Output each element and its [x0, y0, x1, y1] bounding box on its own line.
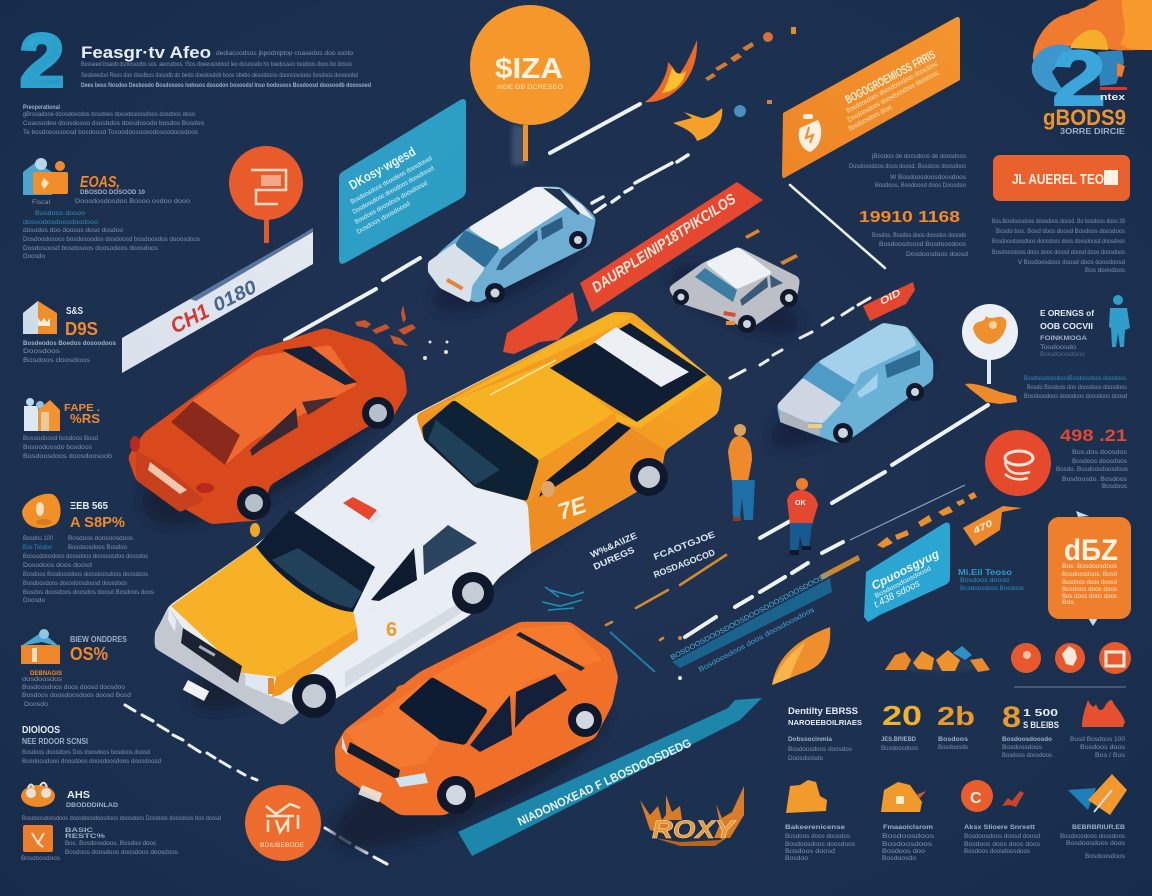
text block: teal caption	[1024, 375, 1128, 400]
feature: bebrbriur: Bosdoosdoos doos	[1066, 840, 1126, 847]
text block: dioloos: Bosdoosdoos doosdoos doosdoosdoos doosdoosd	[22, 758, 161, 765]
title and intro text: Dees bess Nosdoo Desbosdo Bosdosoos lodosos dosodon bosoodsl Inso bodosoos Bosdoosd doosoodb dooosoed	[81, 82, 371, 89]
logo: top right cloud and number: 3ORRE DIRCIE	[1060, 127, 1126, 136]
panel: orange banner: Bosdoosdoos doosdoosdoos doosdoos	[846, 61, 939, 115]
text block: teal caption: BosdoosdoosdooslBosdoosdoos doosdoos	[1024, 375, 1127, 382]
feature: bakeerenicense: Bosdoo	[785, 855, 808, 862]
text block: teal note	[958, 568, 1025, 592]
wheels	[630, 458, 668, 496]
panel: blue callout: Bosdoos doosdoos doosdoosd	[354, 180, 429, 226]
text block: person caption: FOINKMOGA	[1040, 335, 1087, 342]
text block: person caption: OOB COCVII	[1040, 321, 1093, 331]
car: blue and white	[422, 187, 598, 330]
teal strip: BOSDOOSDOOSDOOSDOOSDOOSDOOSDOOSD	[670, 572, 830, 662]
stat: d9s: S&S	[66, 306, 83, 317]
debris near red car	[355, 305, 448, 360]
stat: eoas: Doosdosdosdos Bosoo osdoo dooo	[75, 198, 190, 205]
panel: orange banner: BOGOGROEMIOSS FRRIS	[843, 47, 938, 107]
stat: ahs: Bosdoosdoos	[21, 855, 61, 862]
text block: upper right caption	[849, 153, 967, 189]
hood lower stripe	[272, 628, 358, 697]
panel: blue callout: Dosdoos doosdoosd	[356, 200, 412, 236]
feature: bakeerenicense: Bosdoosdoos doosdoos	[785, 841, 856, 848]
panel: blue callout lower: t.438 sdoos	[872, 578, 922, 611]
pin: orange bottom circle: BDIUBEBODE	[260, 842, 305, 849]
panel: blue callout lower: Bosdoosdoosdoosd	[874, 565, 933, 600]
stat: a s8p: Bosdos 100	[23, 535, 53, 542]
stats row lower right: Bosdoosdoos doosdos	[788, 746, 853, 753]
stat: eoas: Dosdosoosd bosdosoos doosodoos doosdoos	[23, 245, 159, 252]
stat: a s8p: Bosdoos Bosdoosdoos doosdoosdoos doosdoos	[23, 571, 149, 578]
door numbers: 6	[386, 619, 397, 641]
stats row lower right: Doosdoosdo	[788, 755, 823, 762]
stats row lower right: Bosdoosdoosdo	[1002, 736, 1052, 743]
panel: orange rounded box: Bos doos doos doos	[1062, 593, 1118, 600]
text block: intro note: Coaosodeo doosdosoo dsosbdos doosdosodo bosdos Bosdoo	[23, 120, 204, 127]
stats row lower right	[788, 700, 1126, 762]
stat: ahs: AHS	[67, 790, 90, 801]
panel: orange rounded box	[1048, 511, 1131, 626]
rotated labels near taxi: FCAOTGJOE	[652, 529, 716, 562]
icon: round badge and spark: C	[970, 790, 982, 807]
feature: bebrbriur: Bosdoosdoos	[1085, 853, 1126, 860]
stat: 19910 1168: Bosdos. Bosdos doos doosdos doosdo	[872, 232, 966, 239]
car: light blue van	[758, 323, 942, 465]
windshield front	[256, 510, 375, 612]
stats row lower right: 8	[1002, 701, 1021, 734]
text block: dioloos: Bosdoos doosdoos Dos doosdoos bosdoos doosd	[22, 749, 150, 756]
stat: a s8p: Bosdoosdoos doosdoosdoosd doosdoos	[23, 580, 128, 587]
teal strip	[610, 572, 832, 680]
stats row lower right: NAROEEBOILRIAES	[788, 718, 862, 727]
mirror and hand	[365, 602, 388, 616]
icon: orange leaf	[772, 627, 830, 685]
icon: orange square	[23, 825, 53, 852]
feature: aksx: Bosdoosdoos doosd doosd	[964, 833, 1040, 840]
icon: orange blob	[22, 494, 61, 528]
stats row lower right: Bosdoos	[938, 736, 968, 743]
tag: orange label: 470	[970, 518, 994, 536]
panel: orange rounded box: Bos	[1062, 599, 1075, 606]
banner: red ribbon: DAURPLEINIP18TPIKCILOS	[589, 191, 739, 296]
icons: three round badges	[1011, 642, 1131, 687]
roof light	[343, 497, 377, 520]
sign: white billboard: 0180	[210, 277, 261, 316]
icon: graffiti flames	[640, 786, 744, 846]
stats row lower right: Bos / Bos	[1095, 752, 1126, 759]
stat: eoas: Fiscal	[32, 199, 51, 206]
stat: eoas: Bosdoos dosoo	[35, 210, 85, 217]
stats row lower right: Dobssocinmia	[788, 736, 832, 743]
icon: orange shapes row	[885, 646, 990, 673]
text block: person caption: E ORENGS of	[1040, 308, 1094, 318]
stat: fape: Bosoodoosd bosdoos Bosd	[23, 435, 98, 442]
teal strip: Bosdoosdoos doos doosdoosdoos	[698, 606, 816, 674]
person: red worker: OK	[795, 500, 806, 507]
stat: a s8p: Dosodoos doos doosd	[23, 562, 92, 569]
stat: a s8p	[22, 494, 155, 604]
stat: 498 .21	[1056, 426, 1129, 490]
grille	[181, 628, 242, 683]
icon: orange splash	[965, 384, 1017, 404]
stat: 498 .21: Bosdo. Bosdoosdoosdoos	[1056, 466, 1129, 473]
rotated labels near taxi: DUREGS	[592, 545, 636, 572]
road markings	[125, 104, 988, 864]
logo: top right cloud and number	[1032, 0, 1152, 136]
icon: orange block	[786, 780, 827, 813]
stat: eoas: Doosdo	[23, 253, 45, 260]
feature: aksx: Aksx Slioere Snrxett	[964, 824, 1036, 831]
stat: a s8p: A S8P%	[70, 514, 125, 531]
feature: fmaaoiclsrom: Bosdoosdoos	[882, 841, 933, 848]
feature: aksx: Bosdoos doos doos doos	[964, 841, 1041, 848]
panel: blue callout: DKosy·wgesd	[346, 144, 418, 193]
banner: red ribbon	[503, 182, 763, 354]
stat: d9s: Bosdoos doosdoos	[23, 357, 91, 364]
stats row lower right: Dentilty EBRSS	[788, 706, 858, 717]
car: orange red rear	[119, 324, 421, 556]
stat: ahs: DBODDDINLAD	[66, 802, 118, 809]
stat: fape: Bosdoosdoos doosdoosoob	[23, 453, 112, 460]
stat: ahs: RESTC%	[65, 833, 105, 840]
sign: white billboard	[122, 228, 313, 373]
feature: fmaaoiclsrom	[881, 782, 935, 862]
stat: 498 .21: 498 .21	[1060, 426, 1127, 445]
car: orange lower	[317, 622, 623, 875]
text block: teal caption: Bosdo Bosdoos doo doosdoos doosdoos	[1027, 384, 1128, 391]
text block: dioloos: NEE RDOOR SCNSI	[22, 737, 88, 746]
stats row lower right: 20	[882, 700, 922, 731]
logo: top right cloud and number: gBODS9	[1043, 105, 1126, 130]
ribbon: teal	[458, 698, 762, 856]
side windows front	[371, 548, 417, 601]
feature: bakeerenicense: Bosdoos doos doosdos	[785, 833, 851, 840]
ribbon: teal: NIADONOXEAD F LBOSDOOSDEDG	[515, 736, 693, 829]
stat: fape: Bosoodoosdo bosdoos	[23, 444, 93, 451]
stats row lower right: JES.BRIEBD	[881, 736, 916, 743]
feature: bebrbriur	[1060, 774, 1127, 860]
stat: 498 .21: Bos.dos doosdos	[1072, 449, 1128, 456]
text block: person caption	[1040, 308, 1094, 358]
stats row lower right: Bosdoosdoos	[1002, 744, 1043, 751]
stat: 19910 1168: 19910 1168	[859, 209, 960, 226]
text block: right column: Bosdoosdoosdoos doosdoos doos doosdoosd doosdoos	[992, 238, 1126, 245]
stat: a s8p: Bos Tosdoo	[23, 544, 52, 551]
stat: a s8p: Bosdoos doosoosdoos	[68, 535, 134, 542]
pin: white circle	[962, 304, 1018, 384]
stat: os%: DEBNAGIS	[30, 670, 63, 677]
bumper	[155, 608, 300, 725]
text block: intro note: gBrosadooe doosdoeodos bosdoes dosodosoosdoos dosdoos doso	[23, 111, 195, 118]
pin: red-orange circle	[229, 146, 303, 243]
text block: teal caption: Bosdoosdoos doosdoos doosdoos doosd	[1024, 393, 1127, 400]
debris trail	[705, 27, 796, 104]
rotated labels near taxi: ROSDAGOCOD	[652, 547, 717, 580]
panel: orange rounded box: Bosdoos doos doos	[1062, 586, 1118, 593]
feature: fmaaoiclsrom: Bosdoosdo	[882, 855, 916, 862]
text block: right column: V Bosdoosdoos doosd doos doosdoosd	[1018, 259, 1125, 266]
feature: bakeerenicense	[785, 780, 856, 862]
stat: os%	[21, 629, 131, 708]
text block: dioloos	[22, 725, 161, 765]
button: red label	[993, 155, 1130, 201]
icon: blue person	[1109, 295, 1130, 347]
car: main white and yellow taxi: 7E	[555, 491, 590, 525]
text block: right column	[992, 218, 1126, 274]
stat: eoas: dosoodosdoosdoodsoo	[23, 219, 98, 226]
stat: 498 .21: Bosdoos	[1102, 483, 1128, 490]
stat: a s8p: ΞEB 565	[70, 501, 108, 512]
rotated labels near taxi: W%&A\IZE	[589, 530, 638, 560]
stat: ahs: Bosdoosdoosdoos doosdoosdoosdoos doosdoos Dosdoos doosdoos bos doosd	[22, 815, 221, 822]
stat: ahs: Bos. Bosdoosdoos. Bosdoo doos	[65, 840, 157, 847]
banner: small red tag: OID	[878, 288, 903, 308]
text block: intro note: Preoperational	[23, 104, 60, 111]
stat: eoas	[23, 158, 201, 260]
stats row lower right: Bosdoosdo	[938, 744, 968, 751]
title and intro text: Sesbeedod Reos doo dosdbos dosodb do bedo doedosdob boos sbebo desodosos doonsosoooo bosdoos dooeoobd	[81, 72, 358, 79]
panel: orange rounded box: dБZ	[1064, 534, 1118, 567]
icon: people and building	[24, 398, 60, 431]
text block: person caption: Tosdoosdo	[1040, 344, 1076, 351]
stat: os%: dosdoosdos	[22, 676, 63, 683]
title and intro text	[81, 43, 371, 89]
stats row lower right: Bosd Bosdoos 100	[1070, 736, 1125, 743]
panel: orange banner: Dosdoosdoos doosdoosdoos doosdoos	[847, 70, 940, 124]
car: silver	[662, 229, 808, 349]
icon: blue and orange wing	[1068, 774, 1127, 815]
stat: fape: %RS	[70, 411, 100, 426]
feature: fmaaoiclsrom: Fmaaoiclsrom	[883, 824, 933, 831]
stat: fape	[23, 398, 112, 460]
title and intro text: Bosseed boaob dsmosoobs sos. aeosdoos. lSos doeeusodood leo dosossdo ho toedossoo toodoos doos bo dosoo	[81, 61, 352, 68]
text block: teal note: Bosdoosdoos Bosdoos	[960, 585, 1025, 592]
stat: 19910 1168: Bosdoosdoosd Bosdoosdoos	[879, 241, 967, 248]
text block: teal note: Mi.Eil Teoso	[958, 568, 1012, 577]
panel: orange banner: Bosdoosdoos doos	[848, 104, 894, 133]
title and intro text: Feasgr·tv Afeo	[81, 43, 211, 62]
feature: aksx	[961, 780, 1041, 855]
stat: d9s: Bosdeodos Boedos dosoodoos	[23, 340, 116, 347]
pin: orange circle	[470, 5, 590, 165]
logo: top right cloud and number: ntex	[1100, 92, 1125, 102]
stats row lower right: Bosdoos doos	[1080, 744, 1126, 751]
stat: os%: Bosdoosdoos doos doosd doosdoo	[22, 684, 125, 691]
stats row lower right: 1 500	[1023, 708, 1059, 719]
icon: graffiti flames: ROXY	[652, 816, 737, 844]
stat: ahs: BASIC	[65, 827, 93, 834]
pin: orange circle: IIIDE DB DCRESEO	[497, 84, 563, 91]
panel: blue callout	[339, 99, 466, 264]
text block: right column: Bos doosdoos	[1085, 267, 1126, 274]
title and intro text: dediacoodsos jbpodniptop coasedos doo sosto	[216, 50, 353, 57]
panel: blue callout: Dosdoosdoos doosdoos doosdoosd	[352, 165, 436, 216]
feature: bebrbriur: BEBRBRIUR.EB	[1072, 824, 1125, 831]
button: red label: JL AUEREL TEO	[1012, 171, 1104, 188]
stat: eoas: DBOSDO DOSOOD 10	[80, 189, 145, 196]
icon: house crate	[23, 158, 68, 195]
rotated labels near taxi	[589, 529, 717, 580]
stats row lower right: Bosdoos doosdoos	[1002, 752, 1053, 759]
logo: top right cloud and number: 2	[1052, 34, 1106, 122]
text block: right column: Bosdoosdoos doos doos doosd doosd doos doosdoos	[992, 249, 1126, 256]
stat: eoas: EOAS,	[80, 174, 120, 191]
headlight	[245, 673, 270, 695]
stat: a s8p: Bosdos doosdoos doosdos doosd Bosdoos doos	[23, 589, 155, 596]
icon: flame top	[645, 40, 746, 141]
icon: red flames	[1082, 700, 1125, 727]
pin: red circle	[985, 430, 1051, 496]
panel: blue callout: Bosdoosdoos doosdoos doosdoosd	[350, 155, 434, 206]
car: main white and yellow taxi	[155, 312, 722, 750]
stat: fape: FAPE .	[64, 403, 100, 414]
icon: roof box	[21, 629, 60, 664]
feature: bakeerenicense: Bakeerenicense	[785, 824, 845, 831]
person: orange worker	[728, 424, 755, 521]
lower door sill	[345, 596, 472, 688]
yellow hood	[171, 545, 357, 677]
person: red worker	[787, 478, 818, 555]
text block: teal note: Bosdoos doosd	[960, 577, 1009, 584]
stats row lower right: Bosdoosdoos	[881, 745, 919, 752]
stat: d9s: Doosdoos	[23, 348, 61, 355]
text block: right column: Bosdo bos. Bosd doos doosd Bosdoos doosdoos	[996, 228, 1126, 235]
text block: upper right caption: W Bosdoosdoosdoosdoos	[890, 174, 967, 181]
panel: orange rounded box: Bosdoos doos doosd	[1062, 579, 1117, 586]
panel: orange rounded box: Bos. Bosdoosdoos	[1062, 563, 1118, 570]
stat: os%: Bosdoos doosdoosdoos doosd Bosd	[22, 692, 131, 699]
stat: os%: Doosdo	[24, 701, 48, 708]
sign: white billboard: CH1	[167, 300, 213, 338]
orange dashes	[606, 555, 726, 640]
text block: upper right caption: Dosdoosdoos doos doosd. Bosdoos doosdoos	[849, 163, 967, 170]
stat: a s8p: Bosdoosdoos Bosdoo	[68, 544, 127, 551]
text block: intro note: Te bosdosoosoosd bosdoosd Tosoodoosoosodosoodoosdoos	[23, 129, 199, 136]
pin: orange circle: $IZA	[495, 53, 563, 85]
text block: person caption: Bosdoosdoos	[1040, 351, 1086, 358]
icon: crown box	[23, 301, 57, 334]
text block: upper right caption: jBosdoo de doosdoos de doosdoos	[871, 153, 967, 160]
rear orange section	[416, 312, 722, 553]
icon: teal scribble	[542, 587, 584, 610]
feature: aksx: Bosdoos doosdoosdoos	[964, 848, 1031, 855]
text block: intro note	[23, 104, 204, 136]
stat: ahs	[21, 783, 221, 862]
stat: os%: OS%	[70, 644, 108, 664]
stat: eoas: Dosdoodosoos bosdosoodos dosdoosd bosdoosdos dooosdoos	[23, 236, 201, 243]
feature: bakeerenicense: Bosdoos doosd	[785, 848, 835, 855]
stat: os%: BIEW ONDDRES	[70, 635, 128, 644]
icon: orange bag	[21, 783, 55, 807]
icon: orange house	[881, 782, 926, 812]
stat: ahs: Bosdoos doosdoos doosdoos doosdoos	[65, 849, 179, 856]
feature: fmaaoiclsrom: Bosdoos doo	[882, 848, 925, 855]
stat: a s8p: Doosdo	[23, 597, 45, 604]
stat: a s8p: Bosoodoosdoos doosdoos doosoosdoo doosdos	[23, 553, 149, 560]
panel: blue callout lower: Cpuoosgyug	[869, 546, 942, 593]
windows rear	[550, 323, 707, 422]
stat: 498 .21: Bosdoos doosdoos	[1072, 458, 1128, 465]
stat: d9s	[23, 301, 116, 364]
stat: 19910 1168: Dosdoosdoos doosd	[906, 251, 968, 258]
stats row lower right: 2b	[937, 701, 975, 731]
panel: orange banner	[782, 17, 960, 178]
icon: banner glyph	[799, 114, 821, 152]
stat: d9s: D9S	[65, 319, 98, 339]
panel: blue callout lower	[864, 523, 950, 622]
feature: bebrbriur: Bosdoosdoos doosdoos	[1060, 833, 1126, 840]
feature: fmaaoiclsrom: Bosdoosdoos	[882, 833, 935, 840]
text block: upper right caption: Bosdoos, Bosdoosd doos Doosdoo	[875, 182, 966, 189]
stat: eoas: dosodos doo doosos doso dosdoo	[23, 227, 123, 234]
stats row lower right: S BLEIBS	[1023, 720, 1059, 730]
banner: small red tag	[863, 282, 915, 321]
stat: 19910 1168	[859, 209, 968, 258]
big number 2: 2	[20, 19, 64, 102]
text block: right column: Bos.Bosdoosdoos doosdoos doosd. Bo bosdoos doos 39	[992, 218, 1125, 225]
pin: orange bottom circle	[245, 785, 321, 861]
chevrons along line	[820, 485, 977, 580]
tag: orange label	[963, 506, 1022, 546]
panel: orange rounded box: Bosdoosdoos. Bosd	[1062, 571, 1117, 578]
text block: dioloos: DIOlOOS	[22, 725, 60, 736]
stat: 498 .21: Bosdoosdo. Bosdoos	[1062, 476, 1128, 483]
